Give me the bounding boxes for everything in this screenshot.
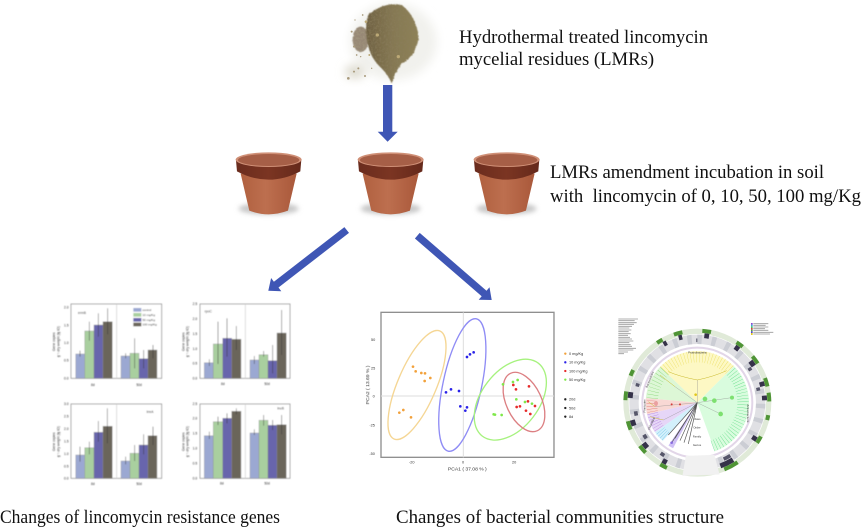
bar chart: rpoC: g⁻¹ dry weight (lg IO) [186, 326, 190, 357]
legend [564, 352, 587, 419]
clade: Chloroflexi [647, 403, 697, 432]
bar chart: lmrA: 8d [91, 482, 95, 486]
bar chart: rpoC: 0.5 [193, 362, 197, 366]
tree branches [648, 357, 743, 446]
bar chart: ermB: 0.5 [64, 359, 69, 363]
tree nodes [654, 393, 734, 444]
chart: PCA scatter plot [365, 312, 587, 473]
clade labels: Genus [693, 443, 702, 447]
points: 100 mg/Kg [512, 384, 536, 415]
bar chart: ermB: 50 mg/Kg [142, 318, 155, 322]
bar chart: lmrA: 2.0 [64, 427, 69, 431]
clade: Actinobacteria [697, 366, 749, 451]
points: 0 mg/Kg [398, 365, 432, 419]
bar chart: ermB: control [142, 308, 152, 312]
bar chart: ermB: g⁻¹ dry weight (lg IO) [56, 326, 60, 357]
bar chart: lmrA: 1.0 [64, 452, 69, 456]
clade labels: Bacteroidetes [645, 370, 655, 388]
pot centre [358, 152, 424, 215]
bar chart: lmrA: 50d [136, 482, 142, 486]
clade labels: Firmicutes [643, 399, 647, 413]
text: incubation conditions [550, 162, 861, 207]
caption: bacterial communities: Changes of bacterial communities structure [396, 507, 724, 528]
clade labels: Proteobacteria [688, 351, 707, 355]
bar chart: ermB: ermB [78, 311, 87, 315]
bar chart: rpoC: rpoC [205, 310, 212, 314]
clade: Firmicutes [646, 398, 697, 414]
bar chart: lmrA: g⁻¹ dry weight (lg IO) [56, 426, 60, 457]
axis labels: 20 [512, 460, 516, 464]
axis labels: PCA2 ( 13.69 % ) [365, 365, 371, 404]
bar chart: lmrA: 1.5 [64, 439, 69, 443]
bar chart: rpoC: 1.5 [193, 332, 197, 336]
bar chart: rpoC: 1.0 [193, 347, 197, 351]
legend: taxa list left (illegible in source, shown as lines) [618, 319, 638, 354]
clade: Bacteroidetes [646, 367, 697, 403]
clade labels: Family [693, 434, 702, 438]
axis labels: -50 [369, 452, 375, 456]
legend: 50 mg/Kg [569, 378, 585, 382]
bar chart: ermB [52, 304, 162, 387]
axis labels: -20 [409, 460, 415, 464]
bar chart: lmrA: 2.5 [64, 415, 69, 419]
bar chart: rpoC: 8d [221, 382, 225, 386]
bar chart: lnuB: 8d [220, 481, 224, 485]
bar chart: lnuB [181, 402, 290, 485]
pot right [474, 152, 540, 215]
arrow: to bacterial communities [415, 233, 492, 300]
pots row [236, 152, 540, 215]
bar chart: ermB: Gene copies [52, 332, 56, 351]
bar chart: ermB: 2.0 [64, 305, 69, 309]
caption: resistance genes: Changes of lincomycin resistance genes [0, 507, 280, 528]
clade: violet [668, 403, 697, 448]
chart: circular taxonomic cladogram [618, 319, 773, 476]
legend: 0 mg/Kg [569, 352, 583, 356]
axis labels: 50 [371, 338, 375, 342]
bar chart: lnuB: 1.5 [193, 432, 197, 436]
bar chart: rpoC: 0.0 [193, 376, 197, 380]
bar chart: lnuB: 0.5 [193, 461, 197, 465]
bar chart: lnuB: lnuB [277, 406, 285, 410]
bar chart: lmrA [52, 402, 162, 486]
legend: 100 mg/Kg [569, 369, 587, 373]
axis labels: -25 [369, 423, 375, 427]
legend: 50d [569, 406, 575, 410]
legend: 20d [569, 398, 575, 402]
clade: Proteobacteria [660, 351, 734, 403]
clade: light blue [655, 403, 697, 441]
ellipses [376, 315, 561, 455]
bar chart: lnuB: 2.5 [193, 402, 197, 406]
bar chart: lmrA: Gene copies [52, 432, 56, 451]
text: incubation conditions: with lincomycin of 0, 10, 50, 100 mg/Kg [550, 186, 861, 207]
bar chart: rpoC: 50d [264, 382, 270, 386]
bar chart: ermB: 8d [91, 383, 95, 387]
legend: 8d [569, 415, 573, 419]
bar chart: lmrA: 0.0 [64, 476, 69, 480]
bar chart: ermB: 1.0 [64, 341, 69, 345]
bar chart: lnuB: 2.0 [193, 417, 197, 421]
bar chart: rpoC: 2.5 [193, 302, 197, 306]
bar chart: ermB: 50d [136, 383, 142, 387]
pot left [236, 152, 302, 215]
title text: hydrothermal treated residues: mycelial residues (LMRs) [459, 49, 654, 70]
axis labels: 0 [373, 395, 375, 399]
bar chart: lnuB: 0.0 [193, 476, 197, 480]
bar chart: lmrA: 0.5 [64, 464, 69, 468]
photo: hydrothermal treated LMR powder [345, 3, 437, 83]
bar chart: lmrA: lmrA [147, 410, 154, 414]
clade labels: Class [693, 417, 701, 421]
bar chart: rpoC [181, 302, 290, 386]
bar chart: rpoC: 2.0 [193, 317, 197, 321]
axis labels [365, 338, 516, 473]
bar chart: ermB: 100 mg/Kg [142, 323, 157, 327]
text: incubation conditions: LMRs amendment incubation in soil [550, 162, 824, 183]
bar chart: lnuB: Gene copies [181, 432, 185, 451]
panel: resistance gene bar charts [52, 302, 290, 486]
bar chart: lmrA: 3.0 [64, 402, 69, 406]
clade labels [643, 351, 750, 447]
title text: hydrothermal treated residues [459, 27, 709, 70]
axis labels: PCA1 ( 37.08 % ) [448, 467, 487, 473]
arrow: to resistance genes [268, 227, 349, 291]
clade labels: Actinobacteria [746, 404, 750, 423]
clade labels: Chloroflexi [647, 416, 656, 430]
clade labels: Order [693, 426, 701, 430]
bar chart: ermB: 10 mg/Kg [142, 313, 155, 317]
bar chart: ermB: 1.5 [64, 323, 69, 327]
bar chart: ermB: 0.0 [64, 376, 69, 380]
title text: hydrothermal treated residues: Hydrothermal treated lincomycin [459, 27, 709, 48]
outer heatmap rings [625, 331, 769, 475]
axis labels: 0 [462, 460, 464, 464]
legend: phyla colours right [751, 323, 773, 335]
points: 50 mg/Kg [492, 379, 533, 416]
bar chart: lnuB: 50d [264, 481, 270, 485]
bar chart: lnuB: g⁻¹ dry weight (lg IO) [186, 426, 190, 457]
axis labels: 25 [371, 366, 375, 370]
bar chart: rpoC: Gene copies [181, 332, 185, 351]
arrow: powder to pots [378, 85, 398, 142]
legend: 10 mg/Kg [569, 361, 585, 365]
bar chart: lnuB: 1.0 [193, 447, 197, 451]
points: 10 mg/Kg [445, 351, 475, 412]
